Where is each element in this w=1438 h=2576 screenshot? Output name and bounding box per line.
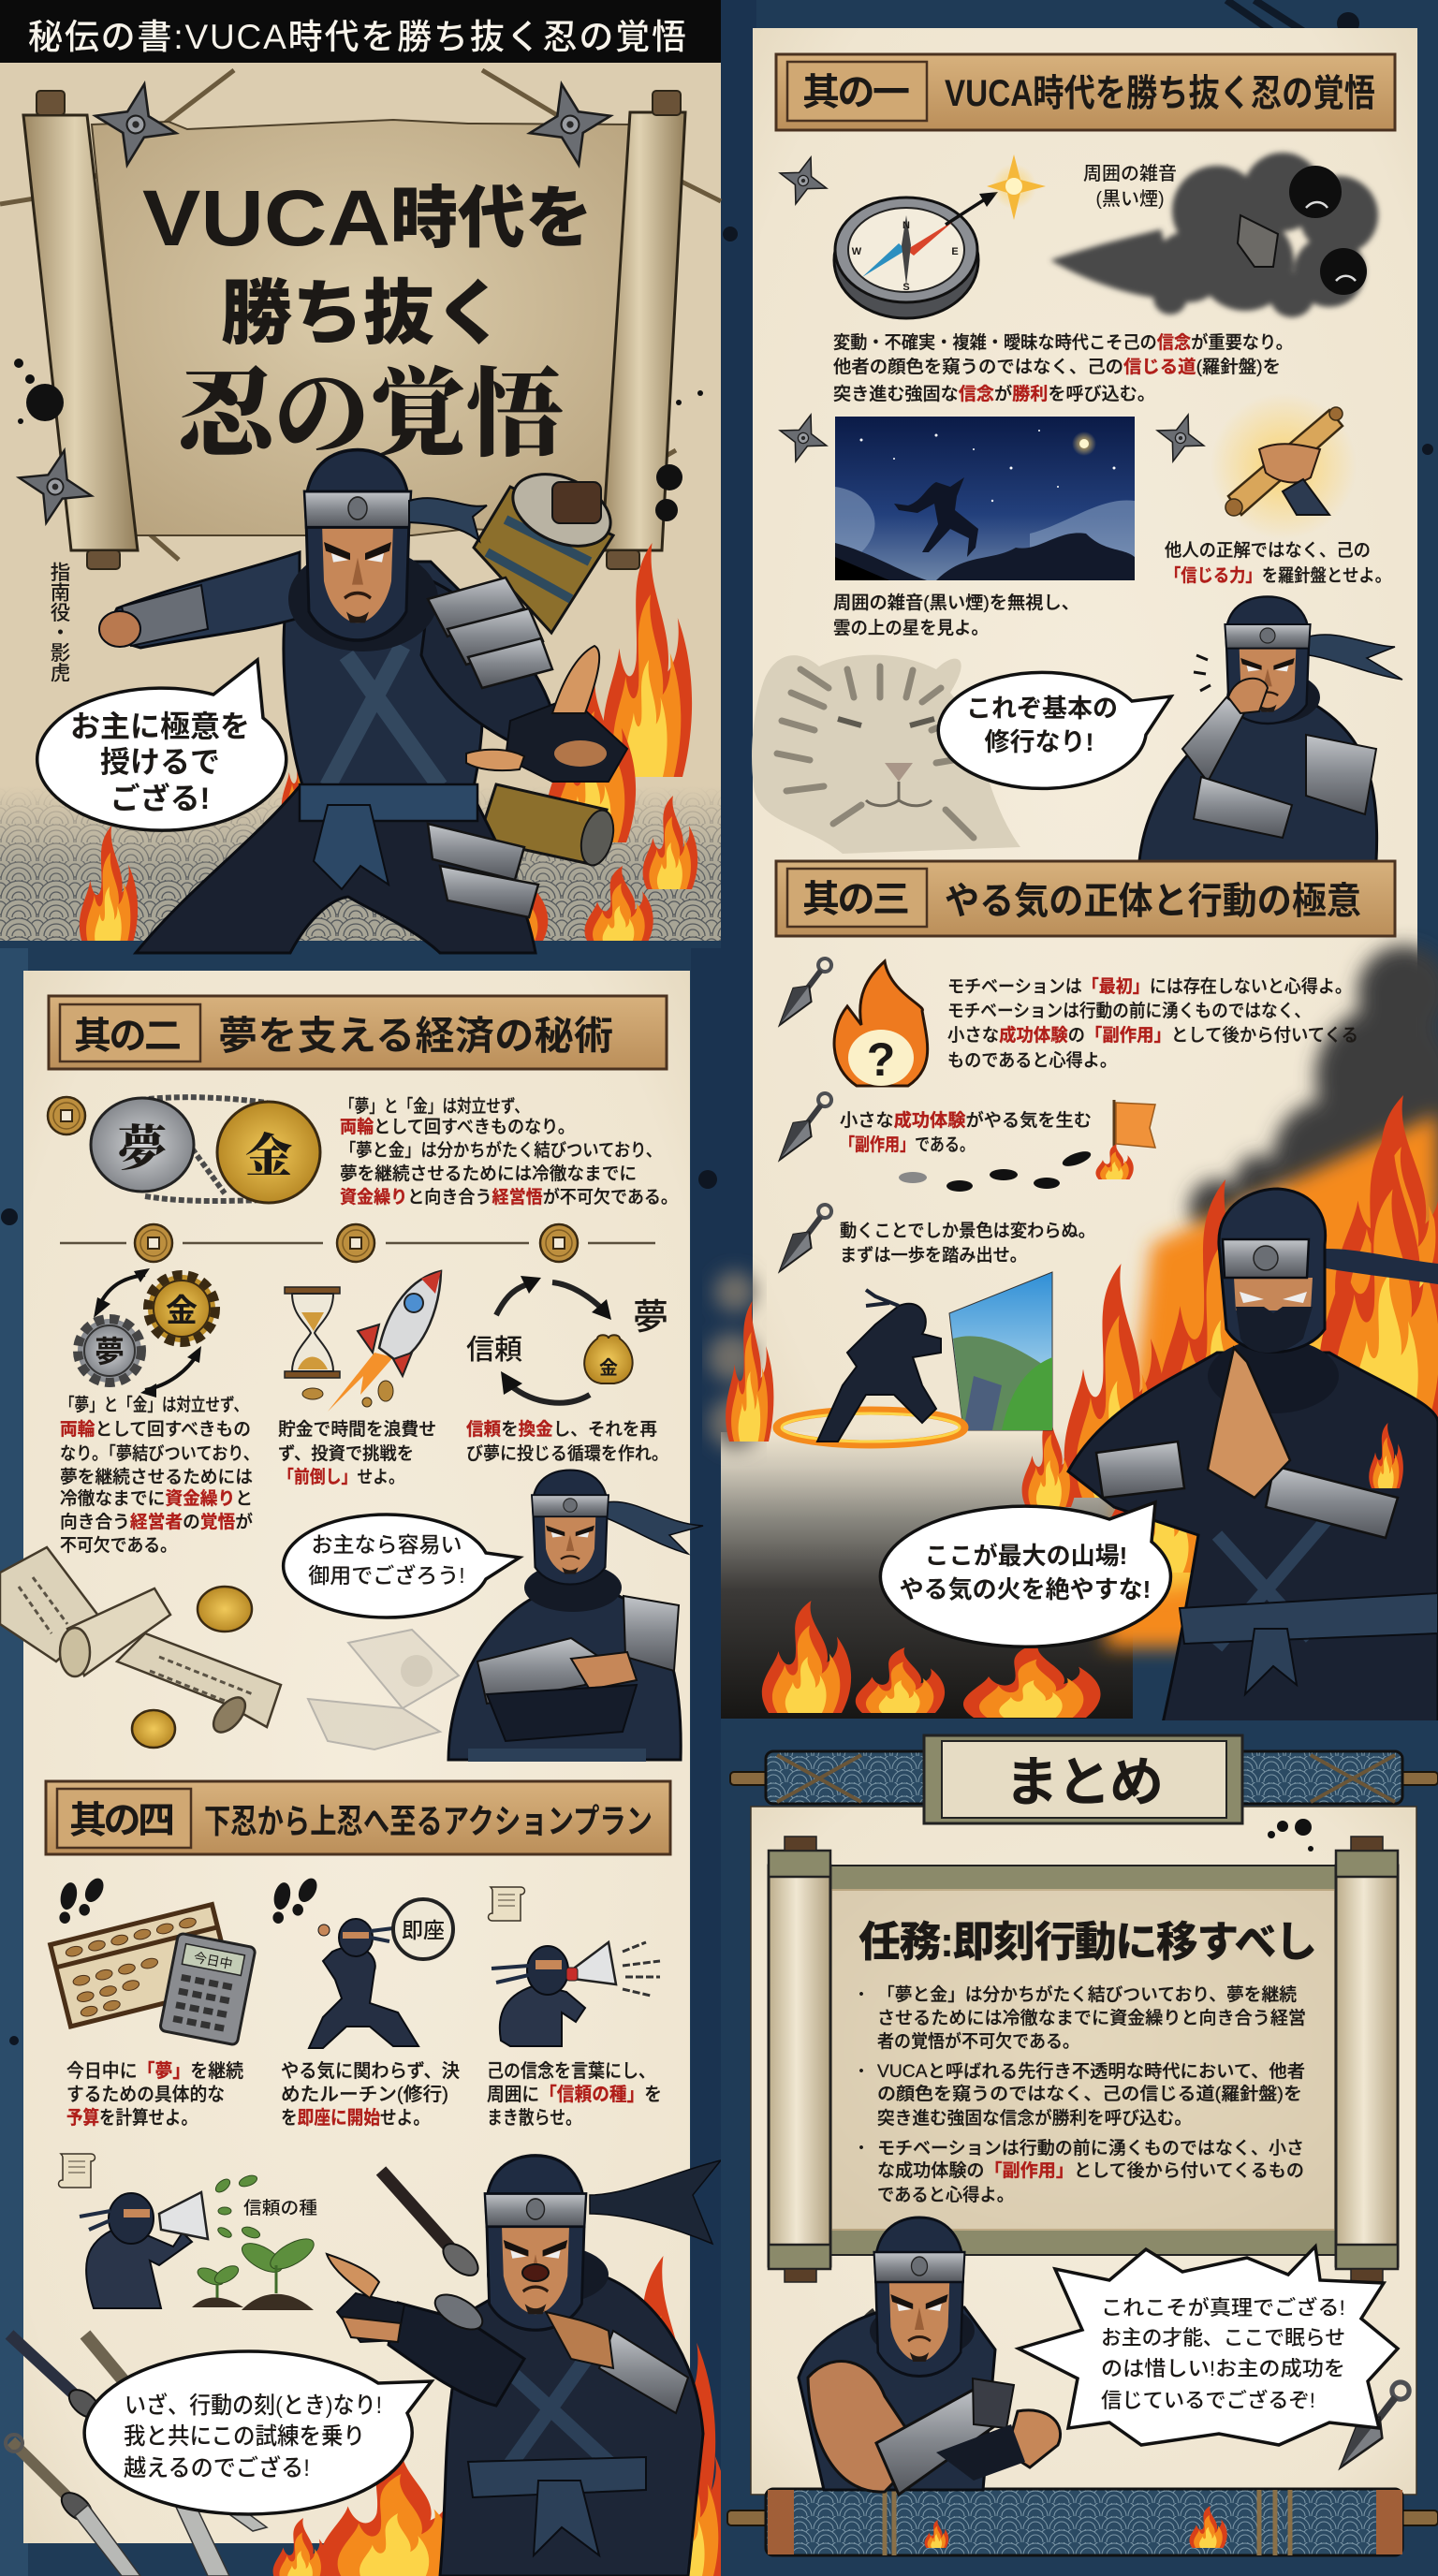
speech bubble: time to act: 越えるのでござる!	[124, 2454, 310, 2481]
text: section 1 lead: 他者の顔色を窺うのではなく、己の 信じる道(羅針盤)を	[833, 357, 1281, 377]
illustration: thinking ninja	[1139, 596, 1402, 861]
icon: flag with small fire	[1095, 1100, 1155, 1179]
illustration: megaphone ninja and sprouts	[80, 2174, 318, 2310]
speech bubble: biggest hurdle: ここが最大の山場!	[925, 1542, 1127, 1570]
icon: abacus and calculator: 今日中	[193, 1950, 234, 1971]
text: dream and money	[340, 1096, 678, 1208]
text: summary bullets: モチベーションは行動の前に湧くものではなく、小さ	[877, 2138, 1304, 2159]
icon: shuriken	[772, 150, 834, 212]
icon: gears and arrows: 夢	[95, 1335, 125, 1368]
panel: section 1 paper	[753, 28, 1417, 1460]
text: summary bullets: 「夢と金」は分かちがたく結びついており、夢を継続	[877, 1984, 1297, 2005]
illustration: night sky leap	[835, 417, 1135, 580]
text: col 2	[278, 1419, 436, 1487]
icon: compass	[834, 192, 998, 318]
speech bubble: time to act: 我と共にこの試練を乗り	[124, 2423, 365, 2450]
panel: summary	[721, 1720, 1438, 2576]
speech bubble: time to act	[84, 2351, 432, 2514]
ink splatter	[14, 359, 703, 521]
icon: coin	[48, 1097, 85, 1134]
rolled scroll on back	[474, 461, 622, 869]
icon: compass: S	[902, 282, 910, 293]
icon: chained dream and money coins: 金	[245, 1130, 292, 1182]
speech bubble: hero: ござる!	[110, 782, 210, 815]
text: power of belief: 他人の正解ではなく、己の	[1165, 540, 1371, 561]
icon: kunai	[770, 1088, 838, 1166]
speech bubble: biggest hurdle: やる気の火を絶やすな!	[900, 1575, 1151, 1603]
text: small success	[840, 1109, 1092, 1155]
text: only by moving	[840, 1221, 1095, 1266]
speech bubble: hero: お主に極意を	[70, 710, 250, 743]
speech bubble: spiky encouragement	[1019, 2247, 1398, 2445]
ropes	[0, 70, 721, 560]
illustration: running ninja in fire ring	[777, 1290, 964, 1444]
main title: 忍の覚悟	[177, 362, 563, 469]
text: summary bullets	[852, 1984, 1306, 2205]
mission title: 任務:即刻行動に移すべし	[858, 1918, 1317, 1966]
text: summary bullets: であると心得よ。	[877, 2185, 1014, 2205]
text: dream and money: 夢を継続させるためには冷徹なまでに	[340, 1164, 637, 1184]
illustration: megaphone ninja and sprouts: 信頼の種	[243, 2198, 317, 2218]
icon: rocket launching with coins	[302, 1271, 441, 1412]
speech bubble: basic training: 修行なり!	[985, 728, 1093, 756]
icon: shuriken	[772, 407, 834, 469]
illustration: black smoke	[1050, 153, 1378, 317]
speech bubble: spiky encouragement: これこそが真理でござる!	[1101, 2296, 1345, 2320]
text: small success: 小さな成功体験がやる気を生む	[840, 1109, 1092, 1131]
speech bubble: easy task	[284, 1515, 520, 1617]
main title: VUCA	[142, 174, 390, 262]
cycle diagram: trust, dream, money: 信頼	[466, 1335, 522, 1366]
flames	[273, 2256, 729, 2576]
main title: 時代を	[390, 182, 593, 256]
icon: chained dream and money coins: 夢	[118, 1122, 167, 1177]
top dowel	[730, 1751, 1438, 1804]
text: step 1: 予算を計算せよ。	[66, 2107, 198, 2129]
text: summary bullets: 突き進む強固な信念が勝利を呼び込む。	[877, 2108, 1192, 2129]
text: step 3: 己の信念を言葉にし、	[487, 2060, 655, 2082]
text: col 1: なり。「夢結びついており、	[60, 1443, 259, 1464]
footprints path	[899, 1149, 1093, 1192]
cycle diagram: trust, dream, money	[466, 1276, 668, 1403]
text: dream and money: 「夢と金」は分かちがたく結びついており、	[340, 1140, 662, 1161]
illustration: ninja guide Kagetora	[99, 450, 627, 953]
illustration: ninja with megaphone	[492, 1942, 660, 2046]
flames	[80, 543, 697, 947]
panel: section 2 content	[0, 996, 703, 1762]
seigaiha waves	[0, 786, 721, 941]
text: only by moving: まずは一歩を踏み出せ。	[840, 1245, 1027, 1266]
illustration: smiling ninja arms crossed	[448, 1471, 703, 1762]
speech bubble: spiky encouragement: お主の才能、ここで眠らせ	[1101, 2326, 1345, 2349]
icon: compass: E	[951, 246, 959, 257]
main hanging scroll	[23, 91, 685, 569]
icon: kunai	[1329, 2375, 1417, 2477]
illustration: scrolls and coins	[0, 1547, 281, 1748]
text: step 1: 今日中に「夢」を継続	[66, 2060, 243, 2082]
panel: section 2 and 4 paper	[23, 971, 690, 2543]
speech bubble: biggest hurdle	[880, 1502, 1170, 1647]
text: step 3	[487, 2060, 662, 2129]
text: summary bullets: VUCAと呼ばれる先行き不透明な時代において、他者	[877, 2061, 1305, 2082]
text: dream and money: 資金繰りと向き合う経営悟が不可欠である。	[340, 1186, 678, 1208]
heading: section 3	[776, 861, 1395, 936]
text: motivation: モチベーションは行動の前に湧くものではなく、	[947, 1001, 1311, 1021]
summary paper	[751, 1807, 1416, 2495]
icon: scroll in hand	[1211, 393, 1357, 539]
speech bubble: spiky encouragement: 信じているでござるぞ!	[1101, 2389, 1315, 2412]
text: step 2: やる気に関わらず、決	[281, 2060, 460, 2082]
label: noise: (黒い煙)	[1095, 188, 1165, 210]
text: summary bullets: ・	[852, 1985, 871, 2005]
text: col 3	[466, 1418, 668, 1464]
speech bubble: hero: 授けるで	[100, 745, 220, 779]
icon: hourglass	[285, 1287, 340, 1378]
text: step 1: するための具体的な	[66, 2084, 225, 2105]
text: col 2: 「前倒し」せよ。	[278, 1467, 404, 1487]
text: col 1: 両輪として回すべきもの	[60, 1419, 251, 1440]
label: noise	[1083, 163, 1177, 210]
text: power of belief: 「信じる力」を羅針盤とせよ。	[1165, 565, 1391, 586]
speech bubble: easy task: お主なら容易い	[311, 1532, 462, 1557]
text: step 3: まき散らせ。	[487, 2107, 581, 2129]
text: section 1 lead	[833, 332, 1293, 404]
speech bubble: basic training	[938, 672, 1171, 788]
text: step 2: を即座に開始せよ。	[281, 2107, 430, 2129]
icon: compass: N	[902, 220, 910, 231]
heading: section 1: 其の一	[802, 72, 910, 113]
icon: compass: W	[852, 246, 862, 257]
text: dream and money: 両輪として回すべきものなり。	[340, 1117, 575, 1137]
text: col 1	[60, 1395, 259, 1556]
panel: hero cover	[0, 0, 721, 953]
text: col 2: 貯金で時間を浪費せ	[278, 1419, 436, 1440]
icon: mini scroll	[489, 1887, 524, 1921]
title bar	[0, 0, 721, 63]
illustration: faded banknotes	[308, 1630, 459, 1749]
text: step 2: めたルーチン(修行)	[281, 2084, 448, 2105]
text: col 1: 冷徹なまでに資金繰りと	[60, 1488, 253, 1509]
label: noise: 周囲の雑音	[1083, 163, 1177, 184]
text: col 2: ず、投資で挑戦を	[278, 1443, 414, 1464]
heading: section 2: 夢を支える経済の秘術	[218, 1014, 613, 1058]
text: ignore noise: 雲の上の星を見よ。	[833, 618, 989, 638]
icon: guiding star	[987, 154, 1046, 220]
speech bubble: basic training: これぞ基本の	[966, 695, 1118, 723]
heading: section 4: 其の四	[69, 1800, 175, 1841]
icon: kunai	[770, 953, 838, 1032]
heading: section 3: やる気の正体と行動の極意	[945, 881, 1361, 922]
icon: mini scroll	[58, 2154, 95, 2188]
illustration: swords	[6, 2334, 267, 2576]
speech bubble: time to act: いざ、行動の刻(とき)なり!	[125, 2392, 382, 2419]
text: summary bullets: の顔色を窺うのではなく、己の信じる道(羅針盤)を	[877, 2084, 1302, 2104]
text: step 1	[66, 2060, 243, 2129]
icon: flame with question	[834, 961, 928, 1086]
bottom dowel	[727, 2489, 1438, 2555]
text: step 3: 周囲に「信頼の種」を	[487, 2084, 662, 2105]
speech bubble: spiky encouragement: のは惜しい!お主の成功を	[1101, 2357, 1345, 2380]
text: motivation: ものであると心得よ。	[947, 1050, 1117, 1071]
text: ignore noise	[833, 593, 1079, 638]
text: col 1: 「夢」と「金」は対立せず、	[60, 1395, 248, 1415]
text: summary bullets: させるためには冷徹なまでに資金繰りと向き合う経営	[877, 2008, 1306, 2028]
icon: abacus and calculator	[51, 1905, 256, 2045]
illustration: faded tiger	[752, 655, 1020, 854]
text: motivation	[947, 976, 1358, 1071]
title bar: 秘伝の書:VUCA時代を勝ち抜く忍の覚悟	[28, 18, 686, 56]
icon: footprints	[271, 1875, 321, 1924]
illustration: shouting ninja pointing	[327, 2156, 721, 2576]
icon: footprints	[58, 1875, 108, 1924]
text: dream and money: 「夢」と「金」は対立せず、	[340, 1096, 529, 1117]
main title: 勝ち抜く	[221, 274, 506, 354]
panel: section 3 flames and smoke backdrop	[708, 945, 1438, 1737]
text: summary bullets: ・	[852, 2139, 871, 2159]
text: step 2	[281, 2060, 460, 2129]
text: power of belief	[1165, 540, 1391, 586]
text: small success: 「副作用」である。	[840, 1134, 975, 1155]
divider with coins	[60, 1224, 655, 1262]
inner scroll	[769, 1837, 1398, 2282]
heading: section 4: 下忍から上忍へ至るアクションプラン	[204, 1802, 653, 1840]
heading: section 4	[46, 1781, 670, 1854]
icon: gears and arrows: 金	[166, 1294, 198, 1329]
text: col 3: び夢に投じる循環を作れ。	[466, 1443, 668, 1464]
heading: section 2: 其の二	[74, 1016, 182, 1057]
text: col 3: 信頼を換金し、それを再	[466, 1418, 657, 1440]
text: only by moving: 動くことでしか景色は変わらぬ。	[840, 1221, 1095, 1241]
icon: flame with question: ?	[867, 1033, 895, 1086]
text: ignore noise: 周囲の雑音(黒い煙)を無視し、	[833, 593, 1079, 613]
illustration: ninja stance with clock: 即座	[402, 1918, 445, 1942]
text: motivation: 小さな成功体験の「副作用」として後から付いてくる	[947, 1024, 1358, 1046]
text: col 1: 向き合う経営者の覚悟が	[60, 1512, 253, 1532]
cycle diagram: trust, dream, money: 金	[599, 1357, 618, 1379]
speech bubble: hero	[37, 660, 286, 830]
vertical credit: 指南役・影虎	[48, 562, 70, 682]
text: section 1 lead: 突き進む強固な信念が勝利を呼び込む。	[833, 384, 1155, 404]
panel: section 4 content	[6, 1781, 729, 2576]
heading: summary plaque	[924, 1735, 1242, 1823]
heading: section 1	[776, 54, 1395, 130]
heading: section 3: 其の三	[802, 879, 910, 920]
main title	[142, 174, 593, 469]
cycle diagram: trust, dream, money: 夢	[633, 1298, 668, 1338]
icon: gears and arrows	[78, 1268, 215, 1398]
shuriken icons	[10, 76, 619, 532]
speech bubble: easy task: 御用でござろう!	[308, 1563, 465, 1588]
illustration: flexing ninja	[799, 2217, 1061, 2495]
heading: summary plaque: まとめ	[1005, 1752, 1164, 1813]
text: section 1 lead: 変動・不確実・複雑・曖昧な時代こそ己の信念が重要なり。	[833, 332, 1293, 353]
panel: section 1 content	[752, 54, 1402, 861]
icon: shuriken	[1150, 407, 1211, 469]
text: motivation: モチベーションは「最初」には存在しないと心得よ。	[947, 976, 1352, 997]
illustration: ninja stance with clock	[309, 1899, 453, 2048]
ink splatter	[1268, 1819, 1313, 1852]
text: summary bullets: 者の覚悟が不可欠である。	[877, 2030, 1079, 2052]
icon: kunai	[770, 1199, 838, 1278]
text: col 1: 不可欠である。	[60, 1534, 177, 1556]
icon: chained dream and money coins	[91, 1097, 320, 1203]
text: col 1: 夢を継続させるためには	[60, 1467, 253, 1487]
illustration: praying masked ninja	[1068, 1189, 1438, 1732]
panel: section 3 content	[770, 861, 1438, 1732]
heading: section 2	[49, 996, 667, 1069]
text: summary bullets: ・	[852, 2062, 871, 2082]
text: summary bullets: な成功体験の「副作用」として後から付いてくるもの	[877, 2160, 1304, 2181]
illustration: opening landscape	[949, 1272, 1052, 1430]
